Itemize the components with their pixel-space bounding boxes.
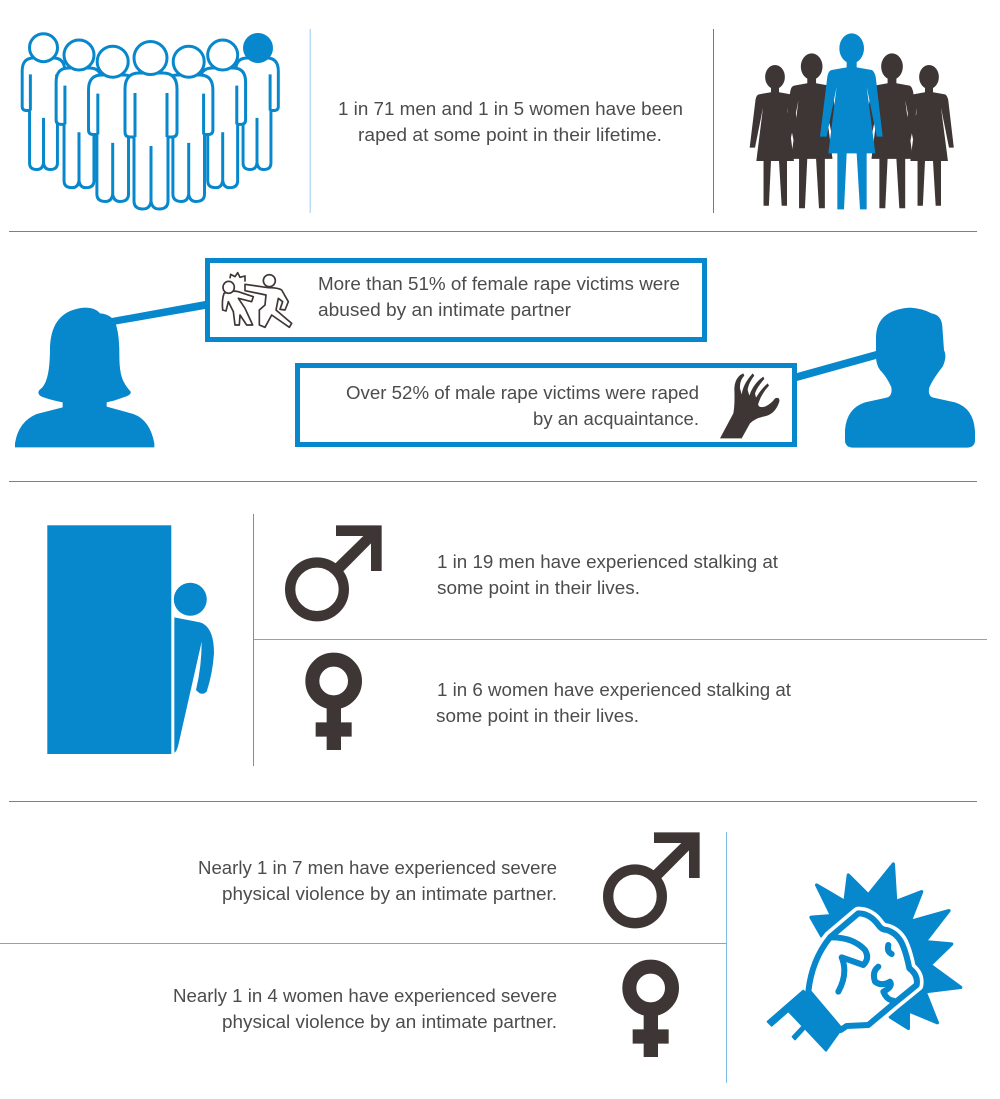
icon: group of seven men, one highlighted — [22, 33, 278, 209]
text: male violence: Nearly 1 in 7 men have experienced severe — [198, 858, 557, 878]
text: female stalking: 1 in 6 women have experienced stalking at — [437, 680, 791, 700]
callout: male victims — [298, 366, 794, 444]
panel: intimate partner violence — [0, 832, 961, 1083]
icon: male symbol — [608, 832, 700, 923]
panel: perpetrators — [15, 260, 975, 448]
text: female victims — [318, 274, 680, 320]
text: rape prevalence: 1 in 71 men and 1 in 5 women have been — [338, 99, 683, 119]
text: female violence: Nearly 1 in 4 women have experienced severe — [173, 986, 557, 1006]
text: male stalking: some point in their lives. — [437, 578, 640, 598]
connector: woman to callout — [112, 301, 205, 325]
text: male stalking — [437, 552, 778, 598]
panel: stalking — [47, 514, 987, 766]
icon: grasping hand — [720, 373, 779, 438]
icon: group of five women, one highlighted — [750, 33, 954, 209]
text: male violence — [198, 858, 557, 904]
panel: rape prevalence — [22, 29, 954, 213]
icon: woman silhouette — [15, 308, 154, 447]
text: male victims: Over 52% of male rape victims were raped — [346, 383, 699, 403]
text: female violence — [173, 986, 557, 1032]
icon: male symbol — [290, 525, 382, 616]
callout: female victims — [208, 260, 704, 340]
text: female violence: physical violence by an intimate partner. — [222, 1012, 557, 1032]
text: female stalking — [436, 680, 791, 726]
text: male victims — [346, 383, 699, 429]
text: male stalking: 1 in 19 men have experienced stalking at — [437, 552, 778, 572]
text: male victims: by an acquaintance. — [533, 409, 699, 429]
icon: assault figures — [222, 273, 292, 327]
text: female stalking: some point in their lives. — [436, 706, 639, 726]
icon: female symbol — [312, 660, 355, 750]
text: male violence: physical violence by an intimate partner. — [222, 884, 557, 904]
text: female victims: More than 51% of female rape victims were — [318, 274, 680, 294]
text: rape prevalence: raped at some point in their lifetime. — [358, 125, 662, 145]
text: rape prevalence — [338, 99, 683, 145]
text: female victims: abused by an intimate partner — [318, 300, 571, 320]
connector: callout to man — [797, 351, 876, 381]
icon: person hiding behind door — [47, 525, 214, 754]
icon: fist with impact burst — [768, 864, 961, 1051]
icon: man silhouette — [845, 308, 975, 448]
icon: female symbol — [629, 967, 672, 1057]
